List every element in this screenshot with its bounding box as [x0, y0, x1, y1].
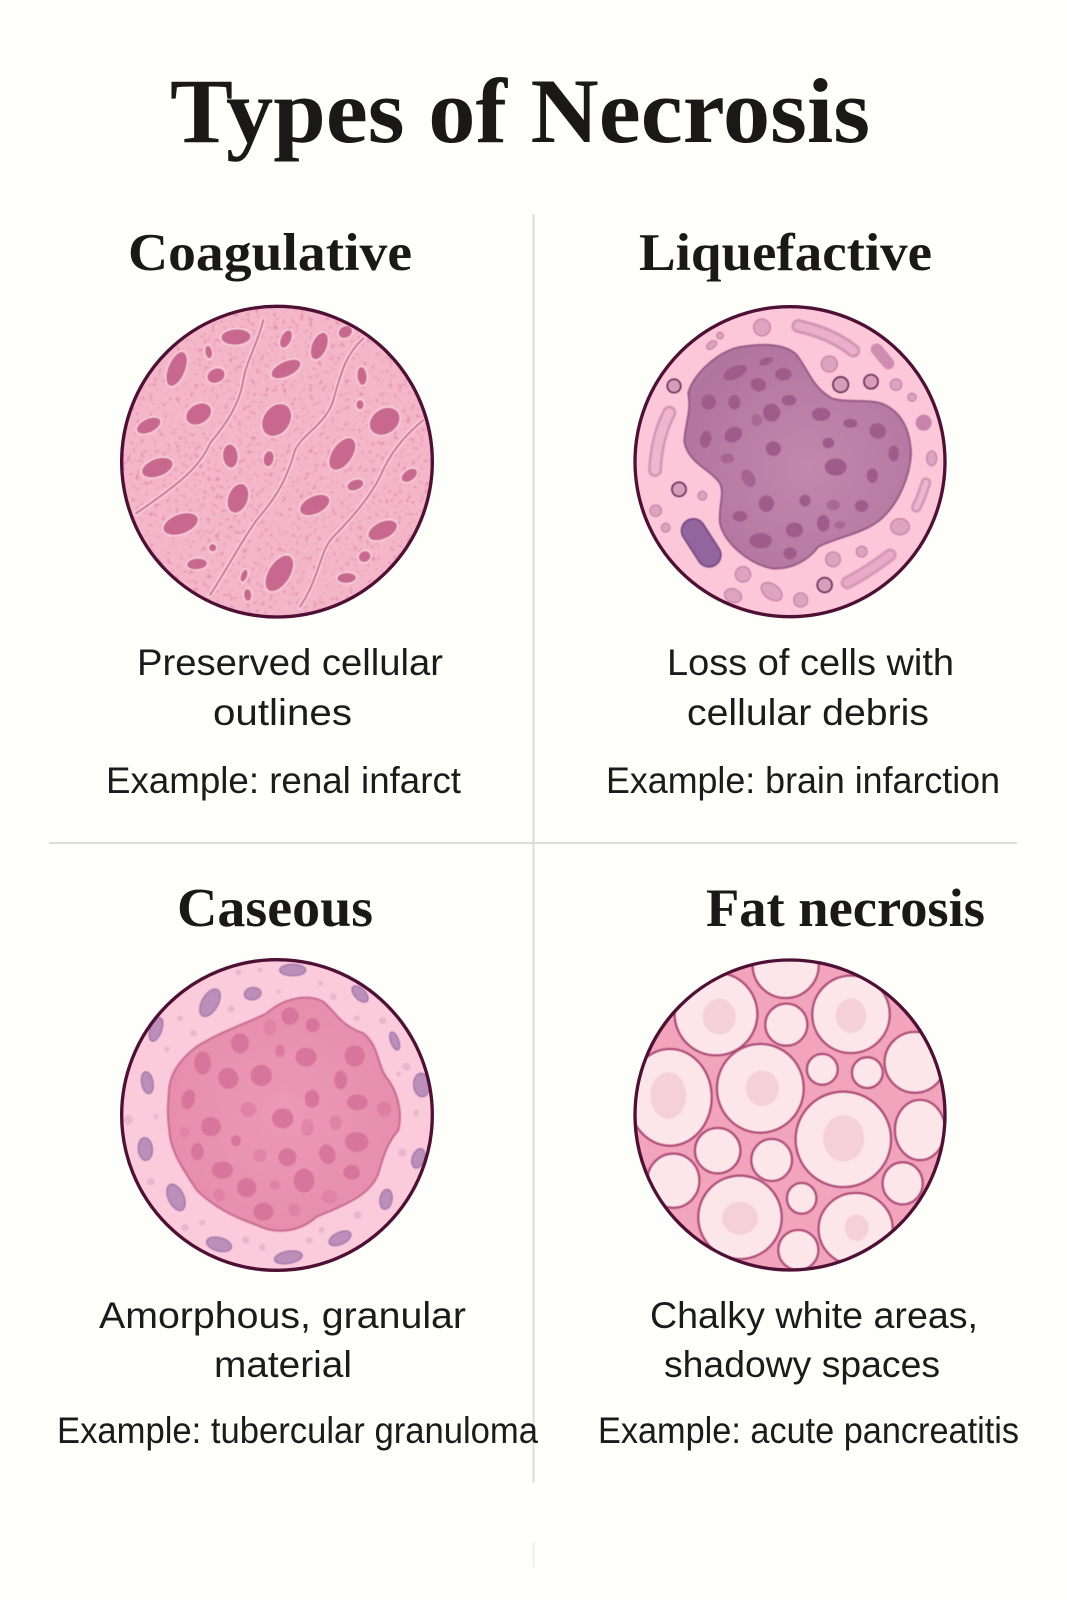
description: fat necrosis [598, 1295, 1019, 1451]
heading: fat necrosis: Fat necrosis [706, 878, 985, 938]
description: caseous: Example: tubercular granuloma [57, 1410, 538, 1451]
description: liquefactive: cellular debris [687, 692, 929, 733]
description: coagulative: Preserved cellular [137, 642, 443, 683]
icon: purple capsule cell [693, 531, 709, 555]
illustration: caseous tissue circle [122, 960, 432, 1270]
description: caseous: Amorphous, granular [99, 1295, 466, 1336]
description: liquefactive [606, 642, 1000, 801]
illustration: liquefactive tissue circle [635, 307, 945, 617]
panel: caseous [57, 877, 538, 1451]
heading: liquefactive: Liquefactive [639, 224, 932, 282]
description: caseous: material [214, 1344, 352, 1385]
panel: fat necrosis [598, 878, 1019, 1451]
illustration: coagulative tissue circle [120, 305, 435, 620]
description: fat necrosis: Example: acute pancreatitis [598, 1410, 1019, 1451]
description: liquefactive: Loss of cells with [667, 642, 954, 683]
description: coagulative: Example: renal infarct [106, 760, 462, 801]
illustration: fat necrosis tissue circle [628, 932, 945, 1270]
description: coagulative [106, 642, 462, 801]
description: coagulative: outlines [213, 692, 352, 733]
panel: coagulative [106, 224, 462, 801]
description: liquefactive: Example: brain infarction [606, 760, 1000, 801]
description: caseous [57, 1295, 538, 1451]
panel: liquefactive [606, 224, 1000, 801]
heading: coagulative: Coagulative [128, 224, 412, 282]
description: fat necrosis: shadowy spaces [664, 1344, 940, 1385]
title: Types of Necrosis [170, 60, 870, 162]
description: fat necrosis: Chalky white areas, [650, 1295, 978, 1336]
heading: caseous: Caseous [177, 877, 373, 938]
